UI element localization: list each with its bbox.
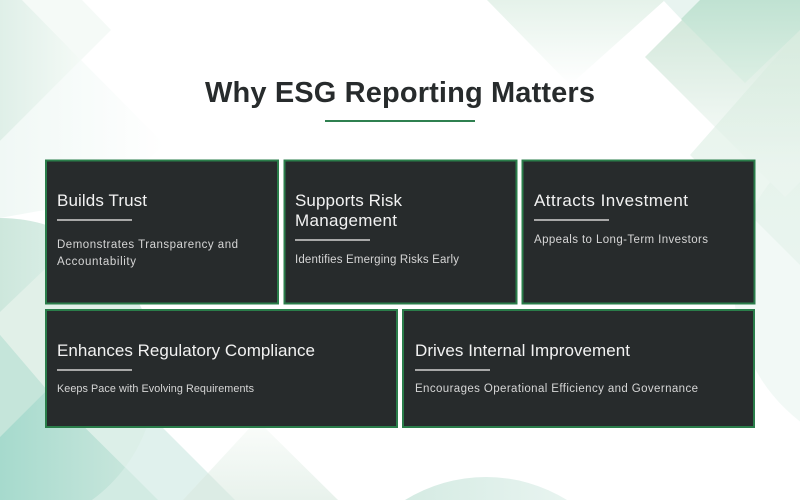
panel: builds trust bbox=[46, 160, 278, 304]
heading: Attracts Investment bbox=[534, 191, 688, 210]
panel: supports risk management bbox=[284, 160, 516, 304]
heading: Enhances Regulatory Compliance bbox=[57, 341, 315, 360]
heading: Drives Internal Improvement bbox=[415, 341, 630, 360]
divider bbox=[534, 219, 609, 221]
title underline bbox=[325, 120, 475, 122]
heading: Supports Risk bbox=[295, 191, 402, 210]
divider bbox=[295, 239, 370, 241]
divider bbox=[57, 369, 132, 371]
panel: attracts investment bbox=[522, 160, 754, 304]
panel: enhances regulatory compliance bbox=[46, 310, 397, 427]
heading: Builds Trust bbox=[57, 191, 147, 210]
divider bbox=[415, 369, 490, 371]
panel: drives internal improvement bbox=[403, 310, 754, 427]
title: Why ESG Reporting Matters bbox=[205, 77, 595, 109]
description: Keeps Pace with Evolving Requirements bbox=[57, 383, 255, 395]
description: Demonstrates Transparency and bbox=[57, 239, 238, 251]
description: Identifies Emerging Risks Early bbox=[295, 254, 459, 266]
description: Accountability bbox=[57, 256, 136, 268]
divider bbox=[57, 219, 132, 221]
description: Encourages Operational Efficiency and Governance bbox=[415, 383, 698, 395]
description: Appeals to Long-Term Investors bbox=[534, 234, 708, 246]
heading: Management bbox=[295, 211, 397, 230]
